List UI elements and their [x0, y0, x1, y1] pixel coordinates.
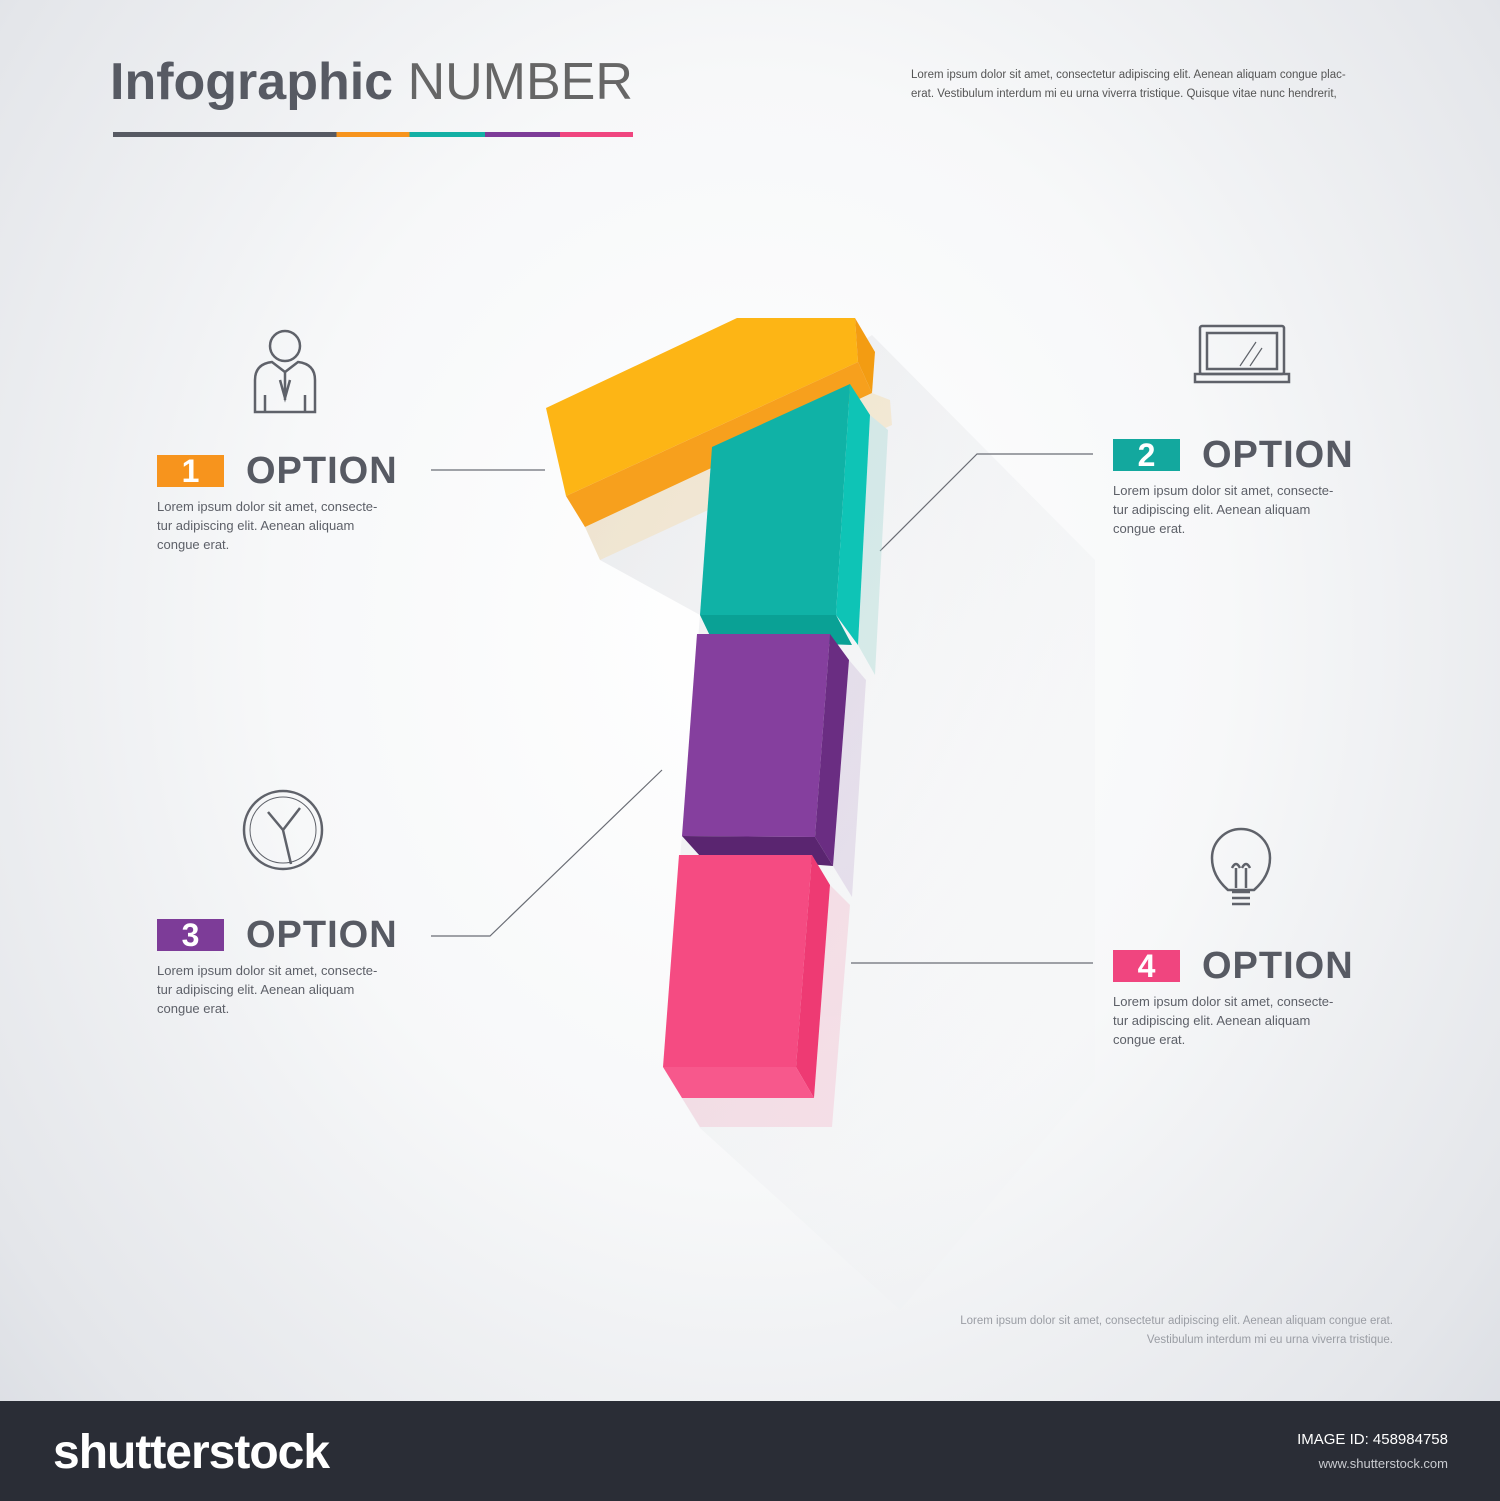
footer bar: IMAGE ID: 458984758 [1297, 1431, 1448, 1448]
footer note: Vestibulum interdum mi eu urna viverra tristique. [1147, 1334, 1393, 1346]
title [110, 53, 633, 137]
option 2: congue erat. [1113, 521, 1185, 536]
option 1: 1 [182, 453, 199, 489]
option 4: Lorem ipsum dolor sit amet, consecte- [1113, 994, 1333, 1009]
icon: laptop [1195, 326, 1289, 382]
connector lines [431, 454, 1093, 963]
option 4: tur adipiscing elit. Aenean aliquam [1113, 1013, 1310, 1028]
option 1: OPTION [246, 450, 398, 492]
option 3: congue erat. [157, 1001, 229, 1016]
footer bar: www.shutterstock.com [1319, 1456, 1448, 1471]
option 1: Lorem ipsum dolor sit amet, consecte- [157, 499, 377, 514]
footer bar [0, 1401, 1500, 1501]
footer note: Lorem ipsum dolor sit amet, consectetur adipiscing elit. Aenean aliquam congue erat. [960, 1315, 1393, 1327]
option 4: congue erat. [1113, 1032, 1185, 1047]
block: yellow [546, 318, 875, 527]
option 3: 3 [182, 917, 199, 953]
option 4 [1113, 945, 1354, 1047]
icon: person [255, 331, 315, 412]
block: pink [663, 855, 830, 1098]
option 1 [157, 450, 398, 552]
option 3: tur adipiscing elit. Aenean aliquam [157, 982, 354, 997]
header text: erat. Vestibulum interdum mi eu urna viverra tristique. Quisque vitae nunc hendrerit, [911, 88, 1337, 100]
icon: bulb [1212, 829, 1270, 904]
footer note [960, 1315, 1393, 1346]
icon: clock [244, 791, 322, 869]
option 2: Lorem ipsum dolor sit amet, consecte- [1113, 483, 1333, 498]
footer bar: shutterstock [53, 1426, 329, 1479]
option 3: Lorem ipsum dolor sit amet, consecte- [157, 963, 377, 978]
block: teal [700, 384, 870, 645]
option 1: tur adipiscing elit. Aenean aliquam [157, 518, 354, 533]
header text [911, 69, 1346, 100]
option 3 [157, 914, 398, 1016]
option 1: congue erat. [157, 537, 229, 552]
header text: Lorem ipsum dolor sit amet, consectetur adipiscing elit. Aenean aliquam congue plac- [911, 69, 1346, 81]
option 3: OPTION [246, 914, 398, 956]
title: Infographic NUMBER [110, 53, 633, 111]
option 2: OPTION [1202, 434, 1354, 476]
option 4: 4 [1138, 948, 1155, 984]
option 2: tur adipiscing elit. Aenean aliquam [1113, 502, 1310, 517]
ghost offsets [585, 393, 892, 1127]
option 2 [1113, 434, 1354, 536]
long shadow [585, 335, 1095, 1310]
option 4: OPTION [1202, 945, 1354, 987]
block: purple [682, 634, 849, 866]
option 2: 2 [1138, 437, 1155, 473]
